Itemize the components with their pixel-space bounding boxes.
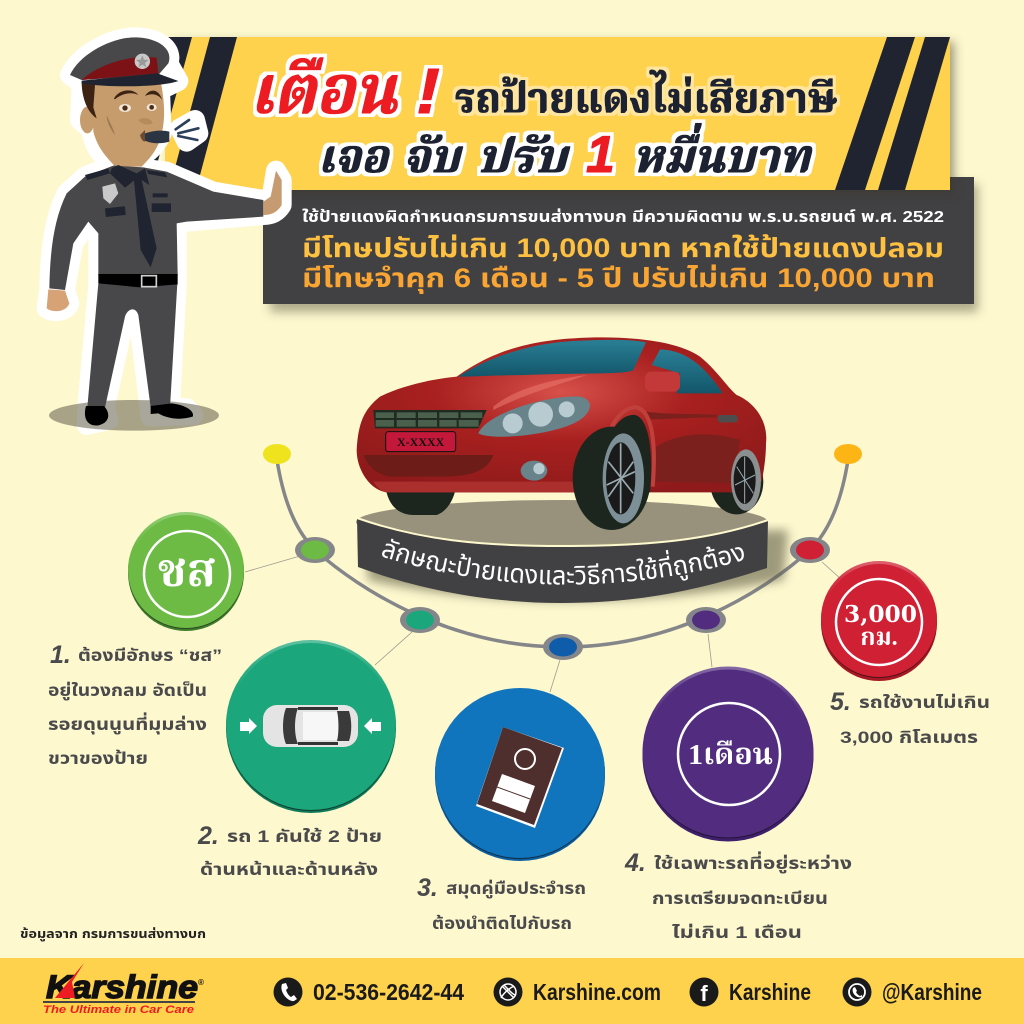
title word: เจอ: เจอ: [318, 131, 391, 182]
title text: line one: รถป้ายแดงไม่เสียภาษี: [455, 70, 837, 121]
whatsapp contact: @Karshine: [882, 979, 982, 1005]
title word: หมื่นบาท: หมื่นบาท: [633, 123, 813, 182]
footer bar: [0, 958, 1024, 1024]
car door handle: [718, 415, 738, 422]
officer eyebrows and eyes: [114, 90, 162, 142]
step 1 caption: รอยดุนนูนที่มุมล่าง: [48, 712, 207, 735]
officer shirt and arms: [49, 166, 263, 290]
officer epaulettes and badge: [85, 168, 171, 217]
Karshine logo: Karshine: [46, 969, 198, 1005]
title number 1: 1: [586, 126, 615, 184]
whistle sound lines: [176, 120, 198, 140]
title banner: [126, 37, 954, 194]
Karshine logo: ®: [198, 978, 204, 987]
car grille: [373, 410, 487, 428]
title word: จับ: จับ: [403, 131, 463, 182]
officer belt: [98, 274, 178, 287]
car licence plate: [386, 432, 456, 452]
step 1 caption: 1.: [50, 641, 71, 669]
car hood highlight: [493, 375, 587, 410]
arc end dot: yellow: [263, 444, 291, 464]
badge value: 3,000: [844, 601, 917, 628]
red car: [357, 337, 766, 530]
step 4 caption: ใช้เฉพาะรถที่อยู่ระหว่าง: [654, 851, 852, 874]
step 1 caption: ขวาของป้าย: [48, 749, 148, 768]
officer collar and tie: [110, 165, 157, 267]
whatsapp contact: [842, 978, 982, 1006]
car body: [357, 337, 766, 492]
car lower intake: [363, 455, 493, 477]
title text: warning: เตือน: [250, 52, 398, 128]
penalty line two: มีโทษจำคุก 6 เดือน - 5 ปี ปรับไม่เกิน 10,000 บาท: [302, 263, 935, 294]
officer neck and head: [93, 78, 164, 167]
title exclamation mark: !: [416, 55, 440, 127]
step 3 caption: [417, 874, 586, 933]
step 5 caption: 5.: [830, 688, 851, 716]
officer white outline: [47, 37, 282, 425]
website contact: [494, 978, 661, 1006]
car sill highlight: [373, 482, 600, 492]
officer pants: [87, 283, 177, 407]
manual book icon: [476, 727, 564, 828]
step 4 caption: [624, 849, 852, 942]
penalty panel: [263, 177, 978, 312]
officer fist: [47, 289, 69, 311]
badge letters: ชส: [158, 545, 216, 596]
step 4 caption: การเตรียมจดทะเบียน: [652, 889, 828, 908]
traffic officer: [47, 37, 282, 431]
car front wheel: [573, 415, 651, 530]
step 1 badge: ชส: [128, 512, 244, 631]
title word: ปรับ: ปรับ: [477, 131, 570, 182]
step 4 badge: one month: [642, 666, 814, 842]
left arrow: [240, 718, 257, 734]
facebook contact: f: [700, 981, 708, 1006]
car licence plate: X-XXXX: [397, 435, 445, 449]
Karshine logo: [43, 963, 204, 1016]
car front tyre left: [386, 490, 455, 515]
facebook contact: Karshine: [729, 979, 811, 1005]
ribbon label: ลักษณะป้ายแดงและวิธีการใช้ที่ถูกต้อง: [382, 538, 744, 585]
car mirror: [645, 372, 680, 392]
badge label: 1เดือน: [688, 739, 773, 771]
step 5 caption: 3,000 กิโลเมตร: [840, 728, 978, 747]
badge unit: กม.: [860, 625, 898, 651]
arc node: purple: [686, 607, 726, 633]
top-view car: [263, 705, 358, 747]
arc end dot: orange: [834, 444, 862, 464]
phone contact: 02-536-2642-44: [313, 979, 464, 1005]
penalty line one: มีโทษปรับไม่เกิน 10,000 บาท หากใช้ป้ายแดงปลอม: [302, 233, 944, 263]
arc node: teal: [400, 607, 440, 633]
step 5 caption: รถใช้งานไม่เกิน: [859, 692, 990, 712]
step 2 caption: [197, 822, 382, 879]
car side crease: [647, 412, 717, 419]
officer ground shadow: [49, 400, 219, 431]
source note: ข้อมูลจาก กรมการขนส่งทางบก: [20, 927, 206, 942]
step 5 caption: [830, 688, 990, 747]
car windshield: [458, 340, 646, 377]
arc node: red: [790, 537, 830, 563]
step 1 caption: อยู่ในวงกลม อัดเป็น: [48, 680, 207, 701]
step 1 caption: [48, 641, 222, 768]
step 3 caption: 3.: [417, 874, 438, 902]
step 4 caption: ไม่เกิน 1 เดือน: [672, 922, 802, 942]
step 3 caption: ต้องนำติดไปกับรถ: [432, 914, 572, 933]
officer open hand: [263, 171, 282, 215]
arc node: green: [295, 537, 335, 563]
right arrow: [364, 718, 381, 734]
website contact: Karshine.com: [533, 979, 661, 1005]
arc connector: [245, 460, 848, 692]
car fog lamp: [521, 461, 547, 481]
step 5 badge: 3,000 km: [821, 561, 937, 681]
car side shading: [652, 434, 740, 483]
step 2 badge: two plates: [226, 640, 396, 813]
car side window: [652, 349, 723, 393]
officer shoes: [85, 403, 193, 425]
car rear wheel tyre: [710, 449, 763, 514]
car rear wheel rim: [731, 449, 761, 511]
step 2 caption: 2.: [197, 822, 219, 850]
penalty intro text: ใช้ป้ายแดงผิดกำหนดกรมการขนส่งทางบก มีความผิดตาม พ.ร.บ.รถยนต์ พ.ศ. 2522: [302, 208, 944, 226]
step 3 caption: สมุดคู่มือประจำรถ: [446, 878, 586, 899]
phone contact: [274, 978, 464, 1006]
officer whistle: [145, 131, 169, 143]
step 2 caption: ด้านหน้าและด้านหลัง: [200, 860, 378, 879]
facebook contact: [690, 978, 811, 1006]
platform ribbon: [356, 500, 794, 608]
arc node: blue: [543, 634, 583, 660]
Karshine logo: The Ultimate in Car Care: [43, 1004, 194, 1016]
officer cap: [70, 37, 178, 86]
car wheel arch highlight: [597, 407, 654, 492]
step 3 badge: manual book: [435, 688, 605, 861]
step 4 caption: 4.: [624, 849, 646, 877]
car headlight: [478, 397, 590, 437]
step 1 caption: ต้องมีอักษร “ชส”: [78, 646, 222, 665]
step 2 caption: รถ 1 คันใช้ 2 ป้าย: [227, 827, 382, 846]
